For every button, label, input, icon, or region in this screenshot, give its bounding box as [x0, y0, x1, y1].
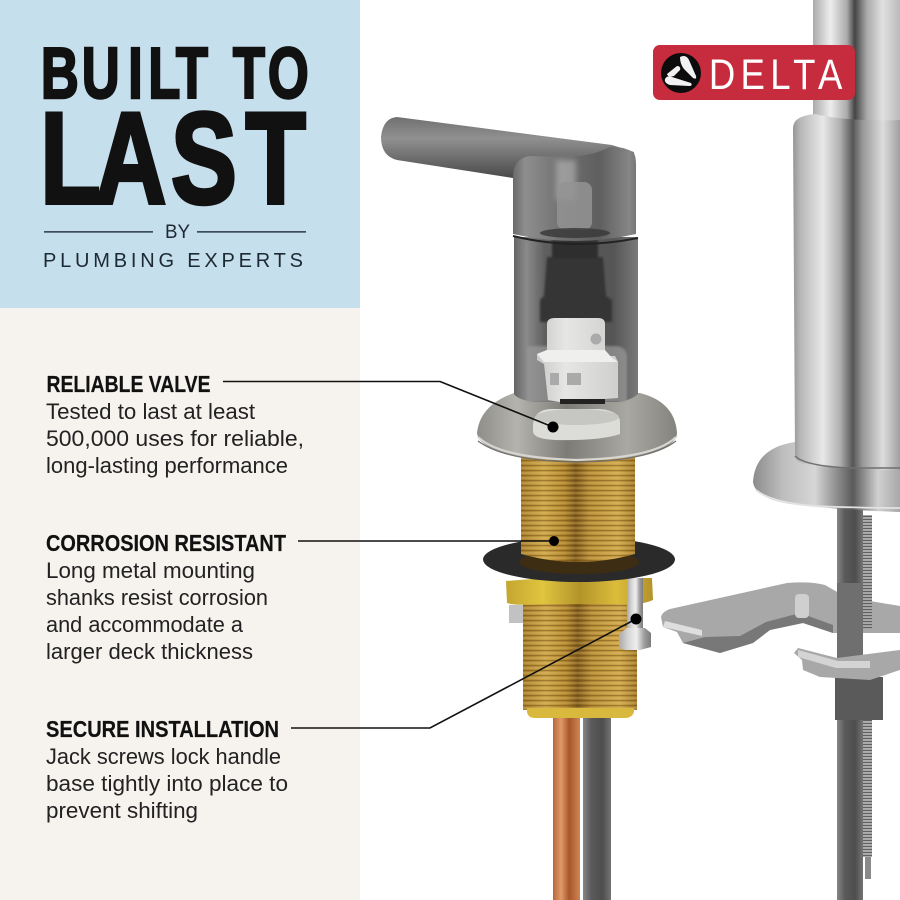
faucet: handle body: [514, 237, 638, 402]
shank: upper threaded brass: [521, 452, 635, 562]
faucet: internal valve stem: [540, 240, 612, 322]
text block: reliable valve: 500,000 uses for reliable,: [46, 426, 304, 451]
callout: leader line to shank: [298, 536, 559, 546]
text block: reliable valve: [46, 371, 304, 478]
panel: features background: [0, 308, 360, 900]
faucet: right spout assembly: [753, 0, 900, 900]
text block: corrosion resistant: [46, 530, 286, 664]
jack screw: right: [619, 578, 651, 650]
title: BUILT TO: [41, 34, 309, 114]
text block: corrosion resistant: and accommodate a: [46, 612, 244, 637]
faucet: lever handle: [381, 117, 634, 178]
bracket: mounting clips: [661, 582, 900, 720]
tube: copper supply line: [553, 716, 580, 900]
text block: secure installation: [46, 716, 288, 823]
valve cartridge: [533, 318, 620, 440]
title: BY: [165, 221, 190, 243]
title: [40, 34, 309, 272]
faucet: handle cap: [513, 147, 638, 244]
logo: Delta: DELTA: [709, 51, 843, 99]
text block: secure installation: prevent shifting: [46, 798, 198, 823]
text block: reliable valve: long-lasting performance: [46, 453, 288, 478]
jack screw: left: [509, 605, 523, 623]
tube: gray supply line: [583, 716, 611, 900]
title: PLUMBING EXPERTS: [43, 250, 303, 272]
text block: corrosion resistant: larger deck thickness: [46, 639, 253, 664]
shank: lower threaded brass: [523, 600, 637, 718]
text block: corrosion resistant: Long metal mounting: [46, 558, 255, 583]
text block: secure installation: base tightly into place to: [46, 771, 288, 796]
logo: Delta: [653, 45, 855, 100]
text block: reliable valve: Tested to last at least: [46, 399, 255, 424]
text block: secure installation: Jack screws lock handle: [46, 744, 281, 769]
text block: secure installation: SECURE INSTALLATION: [46, 716, 279, 742]
text block: corrosion resistant: shanks resist corrosion: [46, 585, 268, 610]
text block: corrosion resistant: CORROSION RESISTANT: [46, 530, 286, 556]
panel: title background: [0, 0, 360, 308]
nut: gold mounting nut: [506, 578, 653, 605]
faucet: base disc: [477, 393, 677, 462]
title: LAST: [40, 86, 306, 231]
washer: black gasket: [483, 537, 675, 582]
callout: leader line to valve: [223, 382, 558, 432]
text block: reliable valve: RELIABLE VALVE: [46, 371, 210, 397]
callout: leader line to jack screw: [291, 614, 642, 728]
